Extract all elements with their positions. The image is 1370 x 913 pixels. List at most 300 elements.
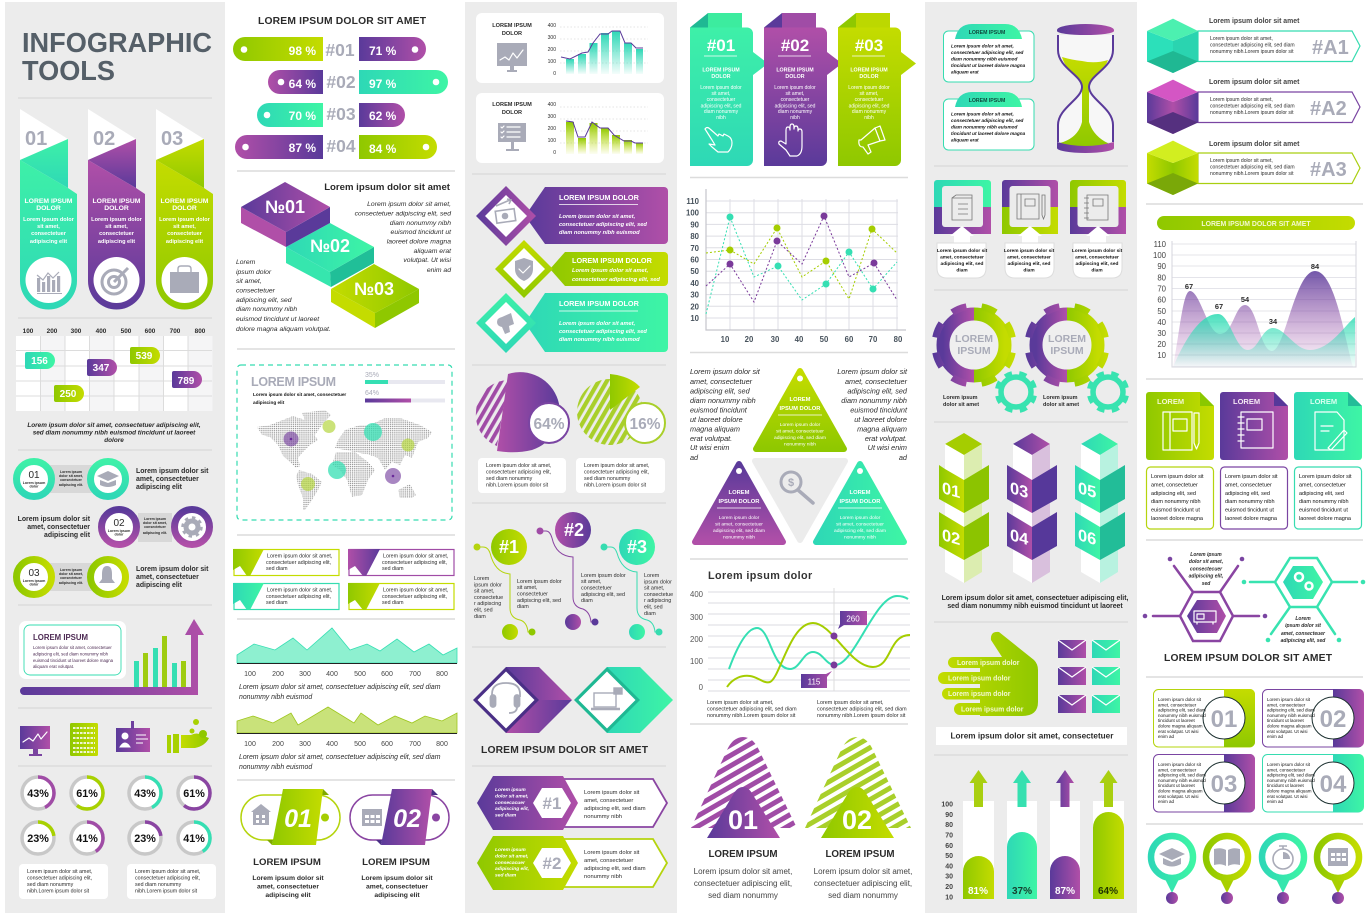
numbered card 04: enim ad — [1267, 799, 1284, 804]
banner: purple: consectetuer adipiscing elit, sed — [559, 222, 647, 228]
hexagon diagram purple — [1143, 552, 1267, 641]
panel: numbered bookmark card 03: LOREM IPSUM — [161, 198, 209, 205]
numbered card 03: nonummy nibh euismod — [1158, 778, 1206, 783]
icon card: notebook and pencil — [1002, 180, 1058, 278]
hexagon diagram purple: consectecuer — [1190, 566, 1223, 572]
hexagon diagram purple: sed — [1202, 581, 1211, 587]
icon: megaphone outline — [859, 126, 885, 154]
triangle: teal: LOREM — [850, 490, 871, 496]
hand with labels: Lorem ipsum dolor — [948, 691, 1011, 698]
text box with tab 1: LOREM IPSUM — [969, 30, 1005, 36]
panel: numbered bookmark card 03: sit amet, — [173, 224, 196, 230]
text block: steps left: sit amet, — [236, 278, 262, 285]
arrow bar chart: 87% — [1055, 886, 1075, 897]
mountain area chart: 80 — [1157, 274, 1167, 282]
text block: triangles right: adipiscing elit, sed — [847, 386, 908, 396]
dotted line chart: 20 — [745, 335, 754, 344]
mountain area chart: 54 — [1241, 295, 1250, 304]
icon card: spiral notebook — [1070, 180, 1126, 278]
icon: megaphone — [497, 313, 514, 334]
numbered card 01: enim ad — [1158, 734, 1175, 739]
panel: line chart card bottom: 400 — [548, 102, 556, 108]
hexagon row #1: Lorem ipsum dolor sit — [584, 790, 640, 796]
percentage pill bars: 62 % — [369, 109, 397, 123]
hexagon row #2: consecacuer — [495, 860, 526, 866]
tall tag card #02: Lorem ipsum dolor — [774, 85, 816, 91]
step 02 row: Lorem ipsum dolor sit — [18, 516, 91, 523]
arrow bar chart: 80 — [945, 822, 953, 829]
pie chart 16% — [577, 374, 665, 445]
icon: cog pair — [1295, 573, 1312, 590]
icon card: spiral notebook: adipiscing elit, sed — [1076, 261, 1119, 267]
connector node #2 — [536, 512, 626, 630]
arrow bar chart: 50 — [945, 853, 953, 860]
icon card: book: diam — [956, 268, 968, 274]
area chart: teal: 100 — [244, 671, 256, 678]
document card purple: LOREM — [1233, 397, 1260, 406]
icon: monitor — [20, 726, 50, 756]
panel: numbered bookmark card 02: adipiscing elit — [98, 239, 135, 245]
text box with tab 1 — [944, 24, 1034, 82]
percentage pill bars: 84 % — [369, 142, 397, 156]
row #A2: nonummy nibh.Lorem ipsum dolor sit — [1210, 110, 1294, 116]
icon: hand with coins — [167, 719, 209, 753]
dotted line chart: 80 — [690, 232, 700, 241]
numbered card 01: Lorem ipsum dolor sit — [1158, 697, 1202, 702]
callout: teal: consectetuer adipiscing elit, — [266, 594, 331, 600]
growth chart with text card: LOREM IPSUM — [33, 633, 88, 642]
step №01: №01 — [265, 197, 305, 217]
text block: steps left: dolore magna aliquam volutpat. — [236, 326, 331, 333]
text block: columns caption: Lorem ipsum dolor sit amet, consectetuer adipiscing elit, — [942, 595, 1129, 602]
numbered card 02: Lorem ipsum dolor sit — [1267, 697, 1311, 702]
text block: triangles left: Ut wisi enim — [690, 443, 729, 452]
connector node #2: diam — [581, 598, 593, 604]
icon card: book: Lorem ipsum dolor sit — [937, 248, 988, 254]
tall tag card #03: consectetuer — [855, 97, 884, 103]
panel: line chart card bottom: 0 — [553, 150, 556, 156]
percentage pill bars: 64 % — [289, 77, 316, 91]
triangle: teal — [816, 464, 904, 542]
text box left — [19, 864, 108, 899]
callout boxes — [233, 549, 454, 610]
pie chart 64%: 64% — [533, 416, 565, 433]
gear group 1 — [935, 306, 1035, 411]
curve chart — [690, 570, 910, 719]
icon: hourglass — [1057, 24, 1114, 153]
step 01 row: Lorem ipsum — [60, 470, 82, 474]
gear group 2: IPSUM — [1050, 345, 1084, 357]
caption bar: Lorem ipsum dolor sit amet, consectetuer — [951, 732, 1114, 740]
text block: triangles left: Lorem ipsum dolor sit — [690, 367, 761, 376]
panel: line chart card bottom: 300 — [548, 114, 556, 120]
text box pie left: consectetuer adipiscing elit, — [486, 470, 551, 476]
numbered card 04: amet, consectetuer — [1267, 768, 1306, 772]
percentage pill bars: 98 % — [289, 44, 316, 58]
icon: monitor chart — [497, 43, 527, 72]
numbered card 02: 02 — [1320, 706, 1346, 733]
icon: pointing hand — [705, 128, 732, 152]
badge: 250 — [54, 385, 84, 402]
dotted line chart: 10 — [721, 335, 730, 344]
numbered card 03: amet, consectetuer — [1158, 768, 1197, 772]
3D column 03-04: 04 — [1010, 525, 1029, 549]
pie chart 64% — [476, 372, 569, 452]
3D column 05-06: 06 — [1078, 525, 1096, 549]
striped shape 01: Lorem ipsum dolor sit amet, — [694, 867, 792, 876]
tall tag card #03: sit amet, — [860, 91, 878, 97]
numbered card 02: nonummy nibh euismod — [1267, 713, 1315, 718]
text box left: sed diam nonummy — [27, 882, 74, 888]
icon: banknote — [495, 199, 516, 223]
step 03 row: Lorem ipsum — [60, 568, 82, 572]
row #A1: Lorem ipsum dolor sit amet, — [1210, 36, 1273, 42]
panel: numbered bookmark card 01: adipiscing elit — [30, 239, 67, 245]
row #A1 — [1147, 18, 1360, 73]
dotted line chart: 20 — [690, 302, 700, 311]
dotted line chart: 50 — [690, 267, 700, 276]
hexagon row #2: sed diam — [495, 872, 517, 878]
icon card: book: adipiscing elit, sed — [941, 261, 984, 267]
hexagon row #2: adipiscing elit, sed diam — [584, 866, 646, 872]
3D column 05-06 — [1075, 433, 1125, 583]
hexagon row #2 — [477, 836, 667, 890]
table caption: dolore — [104, 437, 124, 444]
callout: lime 2: Lorem ipsum dolor sit amet, — [383, 588, 448, 594]
mountain area chart: 10 — [1157, 351, 1167, 360]
arrow bar chart: 60 — [945, 843, 953, 850]
text block: triangles right: ut laoreet dolore — [854, 415, 907, 424]
numbered card 04: adipiscing elit, sed diam — [1267, 772, 1315, 778]
badge: 539: 539 — [136, 351, 153, 362]
numbered card 04: Lorem ipsum dolor sit — [1267, 762, 1311, 767]
heading: column 3: LOREM IPSUM DOLOR SIT AMET — [481, 745, 649, 756]
area chart: lime: 200 — [272, 741, 284, 748]
tall tag card #01: nibh — [716, 115, 726, 121]
arrow bar chart: 100 — [941, 802, 953, 808]
callout: 115 — [801, 671, 832, 688]
step 01 row: dolor — [30, 484, 39, 488]
triangle: purple: Lorem ipsum dolor — [719, 515, 760, 521]
ribbon pill 01: LOREM IPSUM — [253, 857, 321, 868]
gear group 2 — [1028, 306, 1127, 411]
dotted line chart: 40 — [690, 279, 700, 288]
triangle: lime: adipiscing elit, sed diam — [774, 435, 826, 441]
text block: steps left: adipiscing elit, sed — [236, 297, 292, 304]
triangle: purple: LOREM — [729, 490, 750, 496]
text box pie right — [576, 458, 665, 493]
triangle: purple: IPSUM DOLOR — [719, 499, 760, 505]
striped shape 02: 02 — [842, 805, 872, 835]
ribbon pill 01: Lorem ipsum dolor sit — [252, 875, 324, 882]
hexagon row #2: amet, consectetuer — [584, 858, 633, 864]
text box pie left: Lorem ipsum dolor sit amet, — [486, 463, 551, 469]
document card lime: amet, consectetuer — [1151, 482, 1198, 488]
donut charts: 23% — [134, 833, 156, 845]
step 01 row: dolor sit amet, — [59, 474, 83, 478]
document card purple: euismod tincidunt ut — [1225, 508, 1274, 514]
percentage pill bars: 71 % — [369, 44, 397, 58]
text box pie right: Lorem ipsum dolor sit amet, — [584, 463, 649, 469]
document card lime: euismod tincidunt ut — [1151, 508, 1200, 514]
text box with tab 1: diam nonummy nibh euismod — [951, 56, 1018, 62]
arrow bar chart: 37% — [1012, 886, 1032, 897]
panel: numbered bookmark card 01 — [20, 109, 77, 310]
text block: steps right: Lorem ipsum dolor sit amet, — [367, 201, 451, 208]
row #A3 — [1147, 141, 1360, 195]
text block: triangles left: euismod tincidunt — [690, 406, 748, 414]
curve chart: 200 — [690, 635, 704, 644]
banner: teal: consectetuer adipiscing elit, sed — [559, 329, 647, 335]
step 02 row: consectetuer — [144, 525, 167, 529]
text block: steps left: diam nonummy nibh — [236, 306, 297, 313]
dotted world map — [257, 410, 432, 510]
striped shape 02: LOREM IPSUM — [825, 849, 895, 860]
icon: briefcase — [170, 266, 199, 293]
ribbon pill 02: adipiscing elit — [374, 892, 420, 899]
document card teal: laoreet dolore magna — [1299, 516, 1352, 522]
connector node #3: consectetue — [644, 592, 673, 598]
icon: bar chart — [37, 272, 62, 294]
callout: 260: 260 — [846, 614, 860, 624]
isometric steps — [241, 182, 419, 328]
hexagon diagram purple: Lorem ipsum — [1190, 552, 1222, 558]
tall tag card #03: diam nonummy — [852, 109, 887, 115]
tall tag card #02: diam nonummy — [778, 109, 813, 115]
text box with tab 2 — [944, 92, 1034, 150]
mountain area chart: 110 — [1154, 240, 1167, 249]
series: lime — [706, 224, 897, 299]
hexagon diagram teal: ipsum dolor sit — [1285, 623, 1321, 629]
tall tag card #01: LOREM IPSUM — [702, 68, 740, 74]
caption bar — [936, 727, 1127, 745]
icon: bell — [99, 566, 115, 583]
table with value badges: 800 — [195, 328, 206, 335]
text block: triangles left: diam nonummy nibh — [690, 396, 756, 405]
numbered card 01: adipiscing elit, sed diam — [1158, 708, 1206, 712]
gear group 1: Lorem ipsum — [943, 395, 978, 401]
panel: numbered bookmark card 03: DOLOR — [172, 205, 197, 212]
arrow bar chart: 70 — [945, 832, 953, 840]
gear group 1: dolor sit amet — [943, 402, 979, 408]
donut charts: 43% — [27, 788, 49, 800]
numbered card 02: enim ad — [1267, 734, 1284, 739]
dotted line chart: 10 — [690, 314, 700, 323]
arrow bar chart: 20 — [945, 884, 953, 891]
connector node #3: #3 — [627, 537, 647, 557]
panel: numbered bookmark card 02: LOREM IPSUM — [93, 198, 141, 205]
curve chart: 400 — [690, 590, 704, 599]
text box with tab 2: aliquam erat — [951, 138, 979, 142]
ribbon pill 02 — [350, 789, 449, 899]
icon: teal cube — [1147, 19, 1198, 73]
callout: teal: Lorem ipsum dolor sit amet, — [267, 588, 332, 594]
area chart: teal: 600 — [381, 671, 393, 678]
connector node #1: Lorem ipsum dolor — [517, 579, 562, 585]
numbered card 01: amet, consectetuer — [1158, 702, 1197, 708]
panel: numbered bookmark card 01: DOLOR — [36, 205, 61, 212]
step №02: №02 — [310, 236, 350, 256]
panel: numbered bookmark card 03: 03 — [161, 128, 183, 150]
3D column 01-02: 01 — [942, 478, 960, 502]
icon: purple cube — [1147, 80, 1198, 134]
step №03: №03 — [354, 279, 394, 299]
growth chart with text card: Lorem ipsum dolor sit amet, consectetuer — [33, 645, 112, 650]
triangle: purple: sit amet, consectetuer — [715, 522, 763, 528]
dotted line chart: 40 — [795, 335, 804, 344]
hexagon row #2: dolor sit amet, — [495, 854, 528, 860]
text box right: nibh.Lorem ipsum dolor sit — [135, 888, 198, 894]
document card purple: amet, consectetuer — [1225, 482, 1272, 488]
series: purple — [706, 212, 897, 302]
icon: graduation cap — [97, 471, 119, 487]
banner: lime: LOREM IPSUM DOLOR — [572, 256, 653, 265]
donut charts: 41% — [76, 833, 98, 845]
numbered card 04 — [1262, 754, 1364, 812]
text block: steps right: laoreet dolore magna — [387, 238, 451, 246]
connector node #1: elit, sed — [474, 608, 493, 614]
text block: triangles right: Ut wisi enim — [868, 443, 907, 452]
ribbon pill 01: 01 — [284, 805, 312, 833]
badge: 156 — [25, 352, 55, 369]
mountain area chart: 70 — [1157, 284, 1167, 294]
pill heading — [1157, 216, 1355, 230]
growth chart with text card: euismod tincidunt ut laoreet dolore magna — [33, 658, 114, 663]
icon card: spiral notebook: Lorem ipsum dolor sit — [1072, 248, 1123, 254]
numbered card 03: adipiscing elit, sed diam — [1158, 772, 1206, 778]
table with value badges — [16, 328, 212, 411]
banner: lime: Lorem ipsum dolor sit amet, — [572, 268, 649, 274]
row #A3: consectetuer adipiscing elit, sed diam — [1210, 164, 1295, 170]
row #A2 — [1147, 79, 1360, 134]
numbered card 03: 03 — [1211, 771, 1237, 798]
tall tag card #02: #02 — [781, 36, 809, 55]
striped shape 01: LOREM IPSUM — [708, 849, 778, 860]
icon: dollar magnifier — [781, 472, 813, 503]
hexagon row #1: Lorem ipsum — [495, 787, 526, 793]
donut charts: 61% — [183, 788, 205, 800]
step 01 row: Lorem ipsum dolor sit — [136, 468, 209, 475]
callout: 260 — [838, 611, 867, 629]
hexagon diagram teal: Lorem — [1295, 616, 1311, 622]
connector node #1: diam — [474, 614, 486, 620]
connector node #1 — [474, 529, 562, 640]
panel: numbered bookmark card 02: consectetuer — [99, 231, 135, 237]
text box with tab 1: aliquam erat — [951, 70, 979, 74]
triangle: lime — [756, 371, 844, 449]
area chart: lime — [237, 707, 457, 771]
mountain area chart: 100 — [1153, 251, 1167, 260]
hexagon row #2: Lorem ipsum dolor sit — [584, 850, 640, 856]
callout: lime 2 — [348, 583, 454, 610]
numbered card 01: dolore magna aliquam — [1158, 724, 1203, 728]
area chart: teal: 700 — [409, 671, 421, 678]
step 02 row: 02 — [113, 518, 125, 529]
connector node #1: diam — [517, 604, 529, 610]
callout: purple — [348, 549, 454, 576]
callout: purple: Lorem ipsum dolor sit amet, — [383, 554, 448, 560]
row #A1: Lorem ipsum dolor sit amet — [1209, 18, 1300, 25]
connector node #3: r adipiscing — [644, 598, 671, 604]
document card teal: amet, consectetuer — [1299, 482, 1346, 488]
panel: numbered bookmark card 03: consectetuer — [167, 231, 203, 237]
tall tag card #03: DOLOR — [859, 74, 879, 80]
step 01 row — [16, 462, 209, 496]
icon row — [20, 719, 209, 756]
numbered card 02: adipiscing elit, sed diam — [1267, 708, 1315, 712]
numbered card 03: dolore magna aliquam — [1158, 788, 1203, 794]
percentage pill bars: 70 % — [289, 109, 316, 123]
striped shape 01 — [691, 737, 797, 900]
callout: lime 1: consectetuer adipiscing elit, — [266, 560, 331, 566]
banner: purple: Lorem ipsum dolor sit amet, — [559, 214, 636, 220]
tall tag card #02: nibh — [790, 115, 800, 121]
world map panel: Lorem ipsum dolor sit amet, consectetuer — [253, 392, 346, 397]
tall tag card #03: Lorem ipsum dolor — [848, 85, 890, 91]
connector node #1: consectetue — [474, 595, 503, 601]
curve chart: Lorem ipsum dolor sit amet, — [817, 700, 884, 706]
pill heading: LOREM IPSUM DOLOR SIT AMET — [1201, 221, 1311, 228]
curve chart: Lorem ipsum dolor — [708, 570, 813, 582]
text block: steps right: volutpat. Ut wisi — [403, 257, 451, 264]
dotted line chart: 30 — [690, 291, 700, 300]
row #A1: consectetuer adipiscing elit, sed diam — [1210, 42, 1295, 48]
step 01 row: Lorem ipsum — [23, 481, 45, 485]
panel: line chart card top: 0 — [553, 71, 556, 77]
donut charts: 61% — [76, 788, 98, 800]
callout: lime 1: sed diam — [266, 566, 288, 572]
hexagon diagram teal: amet, consecteuer — [1281, 631, 1326, 637]
connector node #3: elit, sed — [644, 604, 663, 610]
percentage pill bars: #03 — [326, 104, 356, 124]
connector node #3: diam — [644, 611, 656, 617]
hexagon row #2: adipiscing elit, — [495, 866, 529, 872]
tall tag card #01: consectetuer — [707, 97, 736, 103]
numbered card 01: erat volutpat. Ut wisi — [1158, 729, 1199, 734]
panel: numbered bookmark card 02: Lorem ipsum dolor — [91, 217, 143, 223]
panel: numbered bookmark card 03 — [156, 109, 213, 310]
badge: 539 — [130, 347, 160, 364]
tall tag card #01: DOLOR — [711, 74, 731, 80]
ribbon pill 02: Lorem ipsum dolor sit — [361, 875, 433, 882]
connector node #3 — [600, 529, 673, 640]
callout: teal — [233, 583, 339, 610]
mountain area chart: 30 — [1157, 329, 1167, 338]
icon card: spiral notebook: diam — [1091, 268, 1103, 274]
document card teal: Lorem ipsum dolor sit — [1299, 474, 1352, 480]
step 01 row: consectetuer — [60, 478, 83, 482]
donut charts — [22, 777, 210, 854]
hexagon row #2: #2 — [543, 854, 561, 873]
numbered card 03: enim ad — [1158, 799, 1175, 804]
map pin: stopwatch — [1262, 836, 1304, 904]
badge: 347 — [87, 359, 117, 376]
arrow bar chart: 64% — [1098, 886, 1118, 897]
hexagon row #1: adipiscing elit, — [495, 806, 529, 812]
curve chart: Lorem ipsum dolor sit amet, — [707, 700, 774, 706]
icon: document and pen — [1315, 412, 1347, 450]
icon: safe — [1194, 611, 1216, 624]
connector node #1: Lorem — [474, 576, 490, 582]
dotted line chart: 30 — [771, 335, 780, 344]
map pin: open book — [1206, 836, 1248, 904]
percentage pill bars: #01 — [325, 40, 355, 60]
hexagon diagram purple: adipiscing elit, — [1189, 574, 1223, 580]
area chart: teal: nonummy nibh euismod — [239, 694, 313, 701]
ribbon pill 02: 02 — [393, 805, 421, 833]
hexagon diagram purple: dolor sit amet, — [1189, 559, 1223, 565]
panel: line chart card top: 200 — [548, 47, 556, 53]
